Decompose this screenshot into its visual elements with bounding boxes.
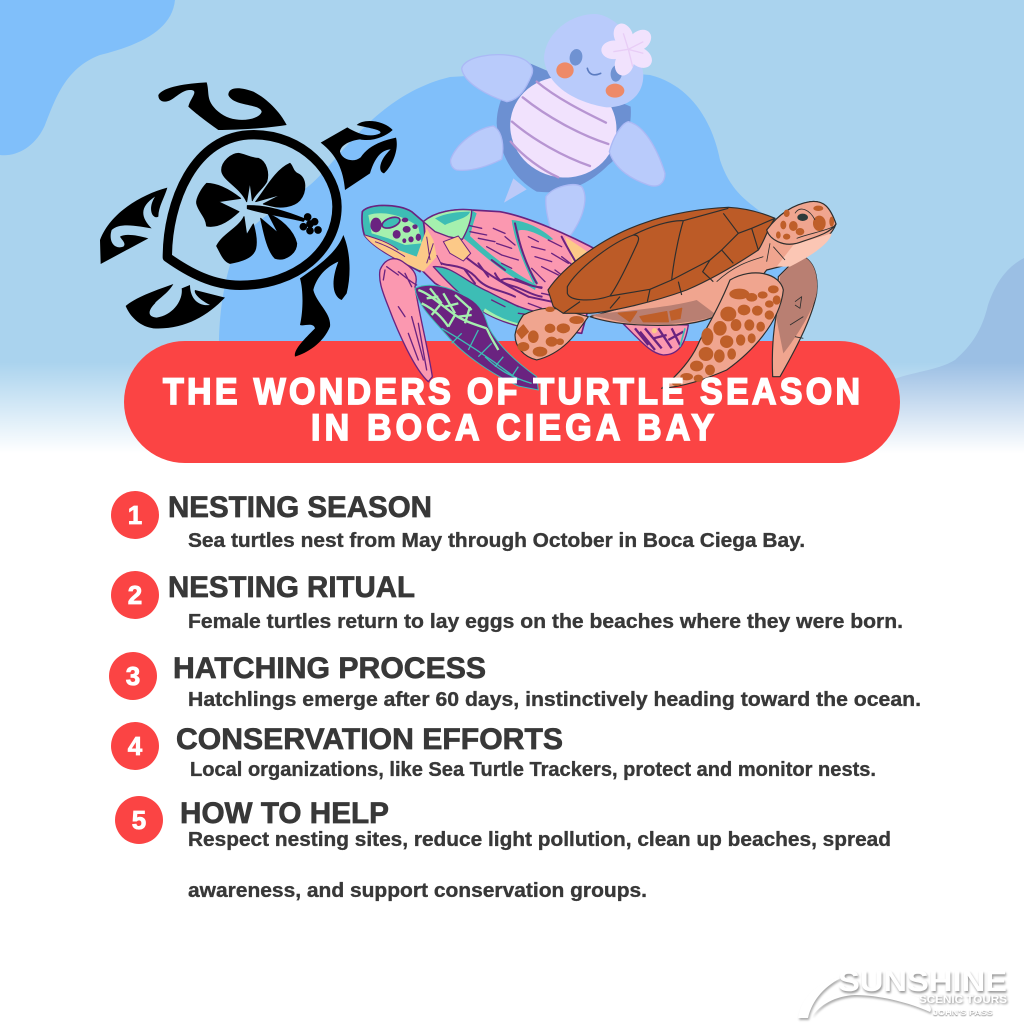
item 5: how to help: 5 bbox=[132, 805, 146, 835]
item 3: hatching process: 3 bbox=[126, 661, 140, 691]
logo: Sunshine Scenic Tours: SCENIC TOURS bbox=[919, 994, 1007, 1006]
item 3: hatching process bbox=[109, 652, 921, 711]
item 5: how to help: awareness, and support conservation groups. bbox=[188, 880, 647, 902]
logo: Sunshine Scenic Tours bbox=[798, 966, 1007, 1018]
title: THE WONDERS OF TURTLE SEASON bbox=[163, 371, 860, 412]
logo: Sunshine Scenic Tours: SUNSHINE bbox=[838, 966, 1007, 998]
title pill background bbox=[124, 341, 900, 463]
icon: colorful sea turtle bbox=[362, 205, 688, 390]
item 5: how to help: HOW TO HELP bbox=[180, 797, 389, 830]
icon: kawaii turtle with flower bbox=[451, 14, 665, 241]
shell body bbox=[418, 210, 603, 333]
item 3: hatching process: Hatchlings emerge after 60 days, instinctively heading toward the ocean. bbox=[188, 689, 921, 711]
item 2: nesting ritual bbox=[111, 571, 903, 633]
item 5: how to help bbox=[115, 796, 891, 902]
item 2: nesting ritual: 2 bbox=[128, 580, 142, 610]
background: sky with blobs bbox=[0, 0, 1024, 453]
item 3: hatching process: HATCHING PROCESS bbox=[173, 652, 486, 685]
front right flipper purple bbox=[415, 285, 538, 390]
front left flipper bbox=[380, 259, 432, 382]
item 2: nesting ritual: NESTING RITUAL bbox=[168, 571, 415, 604]
item 4: conservation efforts bbox=[111, 722, 876, 781]
item 2: nesting ritual: Female turtles return to lay eggs on the beaches where they were born. bbox=[188, 611, 903, 633]
item 5: how to help: Respect nesting sites, reduce light pollution, clean up beaches, spread bbox=[188, 829, 891, 851]
item 4: conservation efforts: CONSERVATION EFFORTS bbox=[176, 723, 563, 756]
item 1: nesting season: Sea turtles nest from May through October in Boca Ciega Bay. bbox=[188, 530, 805, 552]
shell scute lines bbox=[442, 223, 580, 302]
icon: loggerhead turtle in brown and peach bbox=[515, 201, 836, 388]
head bbox=[362, 205, 425, 272]
logo: Sunshine Scenic Tours: JOHN'S PASS bbox=[933, 1010, 993, 1017]
title bbox=[163, 371, 860, 448]
icon: hibiscus flower bbox=[197, 153, 321, 263]
icon: tribal turtle with hibiscus bbox=[100, 82, 397, 357]
title: IN BOCA CIEGA BAY bbox=[311, 407, 714, 448]
item 1: nesting season: NESTING SEASON bbox=[168, 491, 432, 524]
item 4: conservation efforts: 4 bbox=[128, 731, 143, 761]
item 1: nesting season bbox=[111, 491, 805, 552]
back flipper bbox=[623, 324, 688, 355]
item 1: nesting season: 1 bbox=[128, 500, 142, 530]
item 4: conservation efforts: Local organizations, like Sea Turtle Trackers, protect and monitor nests. bbox=[190, 759, 876, 781]
